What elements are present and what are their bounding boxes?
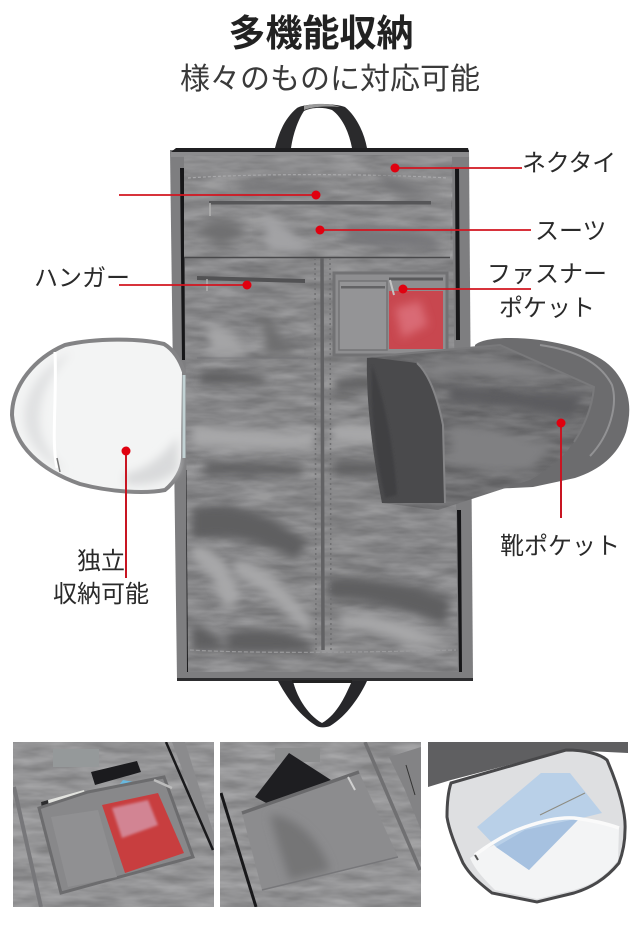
inner lining: [184, 155, 459, 675]
callout: shoe pocket: 靴ポケット: [500, 533, 620, 560]
bottom handle: [278, 681, 367, 727]
callout: unlabelled pocket line: [119, 190, 320, 200]
callout: independent storage: 収納可能: [53, 581, 149, 608]
subtitle: 様々のものに対応可能: [180, 63, 480, 96]
photo: mesh pocket with phone and cards: [13, 742, 214, 907]
center seam: [322, 258, 323, 650]
callout: hanger: ハンガー: [34, 265, 130, 292]
right flap backing: [470, 338, 629, 490]
right mesh pocket: [334, 273, 447, 355]
red mesh: [389, 291, 443, 349]
bottom band seam: [190, 650, 456, 652]
top handle: [275, 104, 367, 148]
callout: independent storage: [53, 446, 149, 608]
callout: necktie: ネクタイ: [522, 150, 616, 177]
shoe pocket: [360, 340, 600, 515]
callout: shoe pocket: [500, 418, 620, 560]
dark gusset: [367, 357, 445, 503]
top flap panel: [184, 174, 452, 258]
garment bag illustration: [12, 104, 629, 727]
photo: zipped pocket with passport: [220, 742, 421, 907]
callout: suit: [316, 218, 607, 245]
bag outer frame: [170, 150, 473, 680]
left flap: independent storage: [12, 340, 184, 492]
callout: zipper pocket: ポケット: [499, 295, 595, 322]
callout: hanger: [34, 265, 252, 292]
title: 多機能収納: [228, 13, 414, 54]
callout: independent storage: 独立: [77, 548, 125, 575]
callout: zipper pocket: ファスナー: [487, 261, 607, 288]
callout: necktie: [390, 150, 616, 177]
left zip pocket: [197, 276, 308, 358]
lining fold shadows: [192, 371, 450, 652]
callout: zipper pocket: [398, 261, 607, 322]
pocket body: [39, 777, 193, 893]
callout: suit: スーツ: [535, 218, 607, 245]
photo: open flap with towel: [428, 742, 628, 907]
